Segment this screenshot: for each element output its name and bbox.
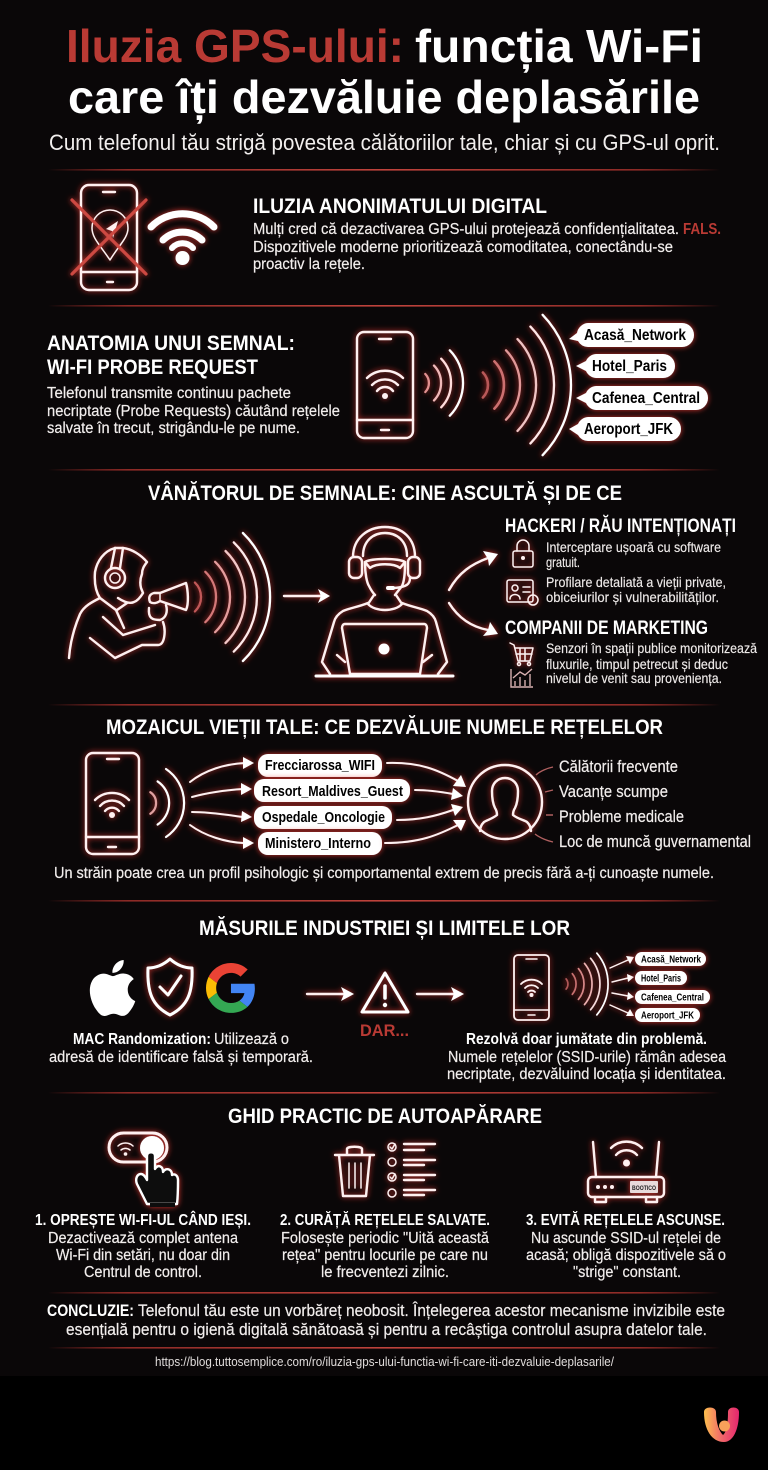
step 2 text: le frecventezi zilnic.: [321, 1264, 449, 1281]
text block: necriptate (Probe Requests) căutând rețelele: [47, 403, 340, 420]
small network labels: Aeroport_JFK: [641, 1010, 695, 1022]
text block: [253, 221, 721, 273]
marketing block: [505, 618, 757, 687]
hackers block: obiceiurilor și vulnerabilităților.: [546, 589, 719, 605]
signal waves: [425, 315, 571, 455]
heading: WI-FI PROBE REQUEST: [47, 356, 258, 379]
marketing block: fluxurile, timpul petrecut și deduc: [546, 656, 728, 672]
arrow: [284, 589, 330, 603]
list of inferences: Călătorii frecvente: [559, 758, 678, 776]
icon: phone with wifi: [357, 332, 413, 438]
step 3 text: Nu ascunde SSID-ul rețelei de: [531, 1230, 721, 1247]
icon: growth chart: [511, 669, 533, 687]
text block: Mulți cred că dezactivarea GPS-ului protejează confidențialitatea.: [253, 221, 679, 238]
heading: ANATOMIA UNUI SEMNAL:: [47, 332, 295, 355]
panel: signal hunter: [69, 481, 757, 687]
network pill: Ospedale_Oncologie: Ospedale_Oncologie: [262, 810, 385, 826]
step 1 text: [35, 1211, 251, 1281]
icon: lock: [513, 540, 533, 567]
label: but: DAR...: [360, 1021, 409, 1040]
network label: Hotel_Paris: [576, 354, 675, 378]
signal waves: [566, 953, 608, 1015]
small network labels: Acasă_Network: [641, 954, 701, 966]
logo: [704, 1408, 739, 1442]
network pill: Ministero_Interno: Ministero_Interno: [265, 836, 371, 852]
title: Iluzia GPS-ului:: [66, 20, 404, 72]
step 2 text: 2. CURĂȚĂ REȚELELE SALVATE.: [280, 1212, 490, 1229]
icon: cart: [510, 643, 533, 666]
heading: GHID PRACTIC DE AUTOAPĂRARE: [228, 1105, 542, 1128]
text block: proactiv la rețele.: [253, 256, 365, 273]
arrows: networks to profile: [385, 763, 466, 843]
icon: google: [206, 963, 255, 1013]
list of inferences: Probleme medicale: [559, 808, 684, 826]
text block: FALS.: [683, 221, 721, 238]
text block: half of the problem: Rezolvă doar jumătate din problemă.: [466, 1031, 707, 1048]
marketing block: nivelul de venit sau proveniența.: [546, 670, 722, 686]
step 1 text: Dezactivează complet antena: [48, 1230, 238, 1247]
icon: warning triangle: [362, 973, 408, 1012]
text block: MAC randomization: adresă de identificare falsă și temporară.: [49, 1049, 313, 1066]
icon: crossed phone with pin: [72, 185, 146, 290]
network label: Aeroport_JFK: [569, 417, 681, 441]
text block: half of the problem: necriptate, dezvăluind locația și identitatea.: [447, 1066, 726, 1083]
network pill: Ministero_Interno: [258, 832, 382, 855]
network pill: Resort_Maldives_Guest: Resort_Maldives_Guest: [262, 784, 403, 800]
title: [66, 20, 703, 124]
network pill: Resort_Maldives_Guest: [254, 779, 410, 802]
panel: digital anonymity: [72, 185, 721, 290]
step 1 text: Centrul de control.: [84, 1264, 202, 1281]
source url: https://blog.tuttosemplice.com/ro/iluzia-gps-ului-functia-wi-fi-care-iti-dezvaluie-deplasarile/: [155, 1355, 614, 1369]
icon: phone with wifi: [514, 955, 549, 1020]
panel: self-defence guide: [35, 1105, 726, 1281]
step 3 text: acasă; obligă dispozitivele să o: [526, 1247, 726, 1264]
step 2 text: Folosește periodic "Uită această: [281, 1230, 489, 1247]
hackers block: gratuit.: [546, 554, 580, 570]
heading: VÂNĂTORUL DE SEMNALE: CINE ASCULTĂ ȘI DE CE: [148, 481, 622, 505]
curved arrows: [449, 551, 498, 636]
network label: Acasă_Network: Acasă_Network: [584, 327, 686, 344]
signal waves: [195, 533, 270, 661]
text block: half of the problem: [447, 1031, 726, 1083]
title: funcția Wi-Fi: [415, 20, 703, 73]
icon: phone with wifi: [86, 753, 139, 854]
step 3 text: 3. EVITĂ REȚELELE ASCUNSE.: [526, 1212, 725, 1229]
hackers block: Interceptare ușoară cu software: [546, 539, 721, 555]
step 3 text: [526, 1212, 726, 1281]
arrow: [307, 987, 354, 1001]
icon: profile circle: [468, 765, 542, 839]
icon: toggle and hand: [109, 1133, 178, 1205]
step 1 text: Wi-Fi din setări, nu doar din: [56, 1247, 230, 1264]
subtitle: Cum telefonul tău strigă povestea călătoriilor tale, chiar și cu GPS-ul oprit.: [49, 130, 720, 155]
icon: hacker with laptop: [316, 527, 453, 676]
list of inferences: Vacanțe scumpe: [559, 783, 668, 801]
icon: person with megaphone: [69, 548, 188, 658]
icon: wifi signal: [151, 214, 214, 265]
conclusion: esențială pentru o igienă digitală sănătoasă și pentru a recâștiga controlul asupra datelor tale.: [66, 1320, 707, 1339]
caption: Un străin poate crea un profil psihologic și comportamental extrem de precis fără a-ți cunoaște numele.: [54, 865, 714, 882]
text block: salvate în trecut, strigându-le pe nume.: [47, 420, 300, 437]
network label: Aeroport_JFK: Aeroport_JFK: [584, 421, 674, 438]
panel: industry measures: [49, 917, 726, 1083]
conclusion: Telefonul tău este un vorbăreț neobosit. Înțelegerea acestor mecanisme invizibile este: [138, 1301, 725, 1320]
network pill: Ospedale_Oncologie: [254, 806, 392, 829]
step 2 text: rețea" pentru locurile pe care nu: [282, 1247, 488, 1264]
small arrows: [610, 956, 634, 1016]
title: care îți dezvăluie deplasările: [68, 71, 700, 124]
icon: router: BOOTICO: [632, 1185, 656, 1192]
icon: trash and checklist: [335, 1143, 435, 1197]
network pill: Frecciarossa_WIFI: [258, 754, 382, 777]
text block: Telefonul transmite continuu pachete: [47, 385, 291, 402]
icon: profile card: [507, 580, 538, 605]
hackers block: [505, 515, 736, 605]
network pill: Frecciarossa_WIFI: Frecciarossa_WIFI: [265, 758, 375, 774]
icon: apple: [90, 960, 135, 1016]
arrow: [417, 987, 464, 1001]
step 3 text: "strige" constant.: [573, 1264, 681, 1281]
small network labels: Cafenea_Central: [641, 992, 704, 1004]
conclusion: [47, 1301, 725, 1339]
text block: MAC randomization: Utilizează o: [214, 1031, 289, 1048]
network label: Acasă_Network: [569, 323, 694, 347]
heading: MOZAICUL VIEȚII TALE: CE DEZVĂLUIE NUMELE REȚELELOR: [106, 716, 663, 739]
marketing block: COMPANII DE MARKETING: [505, 618, 708, 639]
network label: Cafenea_Central: Cafenea_Central: [592, 390, 700, 407]
panel: signal anatomy: [47, 315, 708, 455]
text block: MAC randomization: MAC Randomization:: [73, 1031, 211, 1048]
text block: [47, 385, 340, 437]
step 2 text: [280, 1212, 490, 1281]
heading: ILUZIA ANONIMATULUI DIGITAL: [253, 195, 547, 218]
list of inferences: [559, 758, 751, 851]
text block: half of the problem: Numele rețelelor (SSID-urile) rămân adesea: [448, 1049, 726, 1066]
icon: shield: [148, 959, 192, 1015]
icon: router: [588, 1142, 664, 1202]
heading: [47, 332, 295, 379]
hackers block: Profilare detaliată a vieții private,: [546, 574, 726, 590]
small network labels: [635, 952, 710, 1022]
signal waves: [150, 769, 184, 837]
small network labels: Hotel_Paris: [641, 974, 681, 984]
arrows: phone to networks: [190, 757, 254, 849]
step 1 text: 1. OPREȘTE WI-FI-UL CÂND IEȘI.: [35, 1211, 251, 1229]
heading: MĂSURILE INDUSTRIEI ȘI LIMITELE LOR: [199, 917, 570, 940]
network label: Cafenea_Central: [576, 386, 708, 410]
panel: life mosaic: [54, 716, 751, 882]
text block: MAC randomization: [49, 1031, 313, 1066]
network label: Hotel_Paris: Hotel_Paris: [592, 358, 667, 375]
connectors: [535, 767, 553, 842]
conclusion: CONCLUZIE:: [47, 1301, 134, 1320]
text block: Dispozitivele moderne prioritizează comoditatea, conectându-se: [253, 239, 673, 256]
